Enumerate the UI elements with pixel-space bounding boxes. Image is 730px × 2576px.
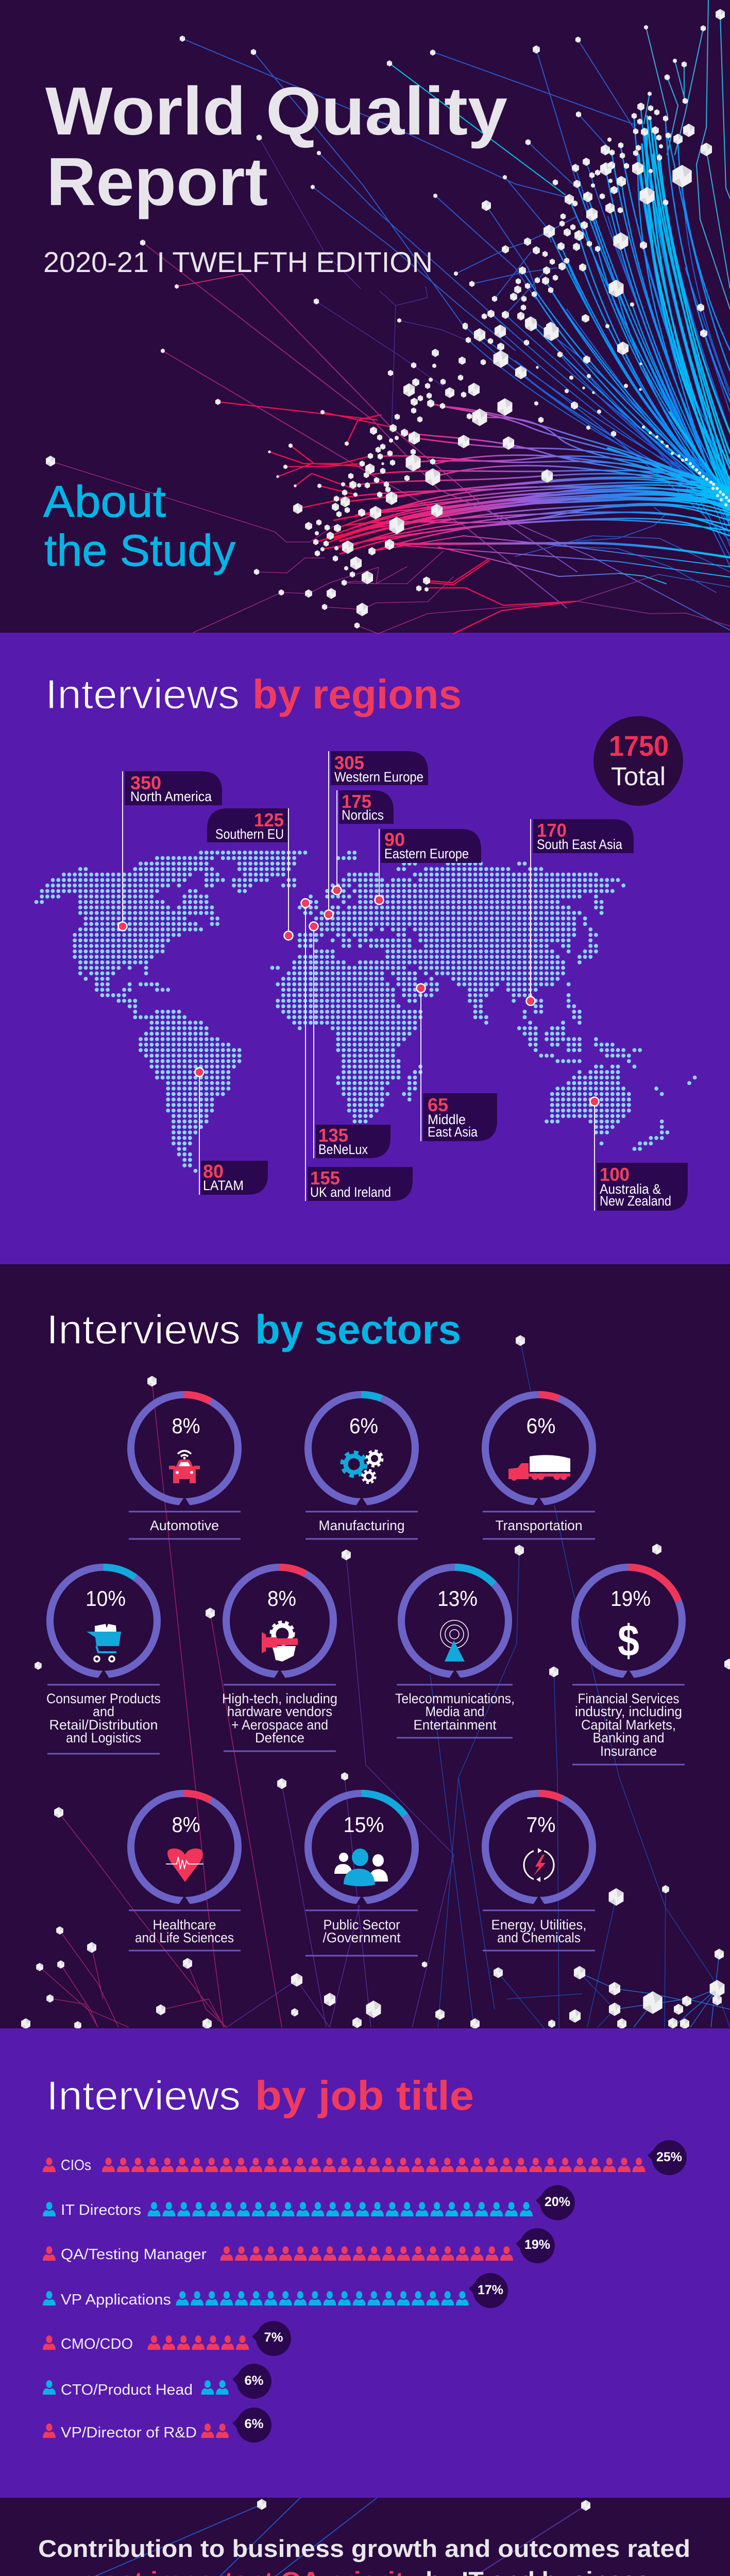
band: job title background <box>0 2028 730 2498</box>
job row: CTO/Product Head 6%: CTO/Product Head <box>61 2382 193 2398</box>
sector: Telecommunications 13%: Telecommunications, <box>395 1691 515 1706</box>
job row: VP Applications 17%: VP Applications <box>61 2292 171 2308</box>
sector: Financial Services 19%: Capital Markets, <box>581 1717 676 1733</box>
hero subtitle: edition: 2020-21 I TWELFTH EDITION <box>43 246 433 278</box>
sector: Manufacturing 6% <box>305 1395 418 1539</box>
sector: Manufacturing 6%: 6% <box>349 1414 378 1438</box>
sector: Public Sector 15%: /Government <box>322 1930 401 1945</box>
job row: IT Directors 20%: IT Directors <box>61 2202 141 2218</box>
flag: 100 Australia and New Zealand: Australia & <box>600 1181 661 1197</box>
band: contribution background <box>0 2498 730 2576</box>
flag: 65 Middle East Asia: Middle <box>428 1112 466 1127</box>
job row: VP/Director of R&D 6%: 6% <box>244 2417 264 2431</box>
sector: Public Sector 15% <box>305 1793 418 1956</box>
sector: Public Sector 15%: Public Sector <box>324 1917 400 1933</box>
sector: Consumer Products 10%: Consumer Products <box>46 1691 161 1706</box>
sectors network artwork <box>40 1341 730 2035</box>
flag: 100 Australia and New Zealand: New Zealand <box>600 1193 671 1209</box>
flag: 135 BeNeLux <box>309 922 391 1158</box>
heading: contribution to business growth: Contribution to business growth and outcomes rated <box>38 2535 690 2562</box>
heading: interviews by job title <box>46 2073 474 2119</box>
sector: High-tech 8%: hardware vendors <box>227 1704 332 1719</box>
sector: Telecommunications 13% <box>395 1567 515 1738</box>
job row: CMO/CDO 7%: 7% <box>264 2330 283 2345</box>
heading: interviews by regions: Interviews <box>45 671 240 717</box>
sector: High-tech 8% <box>222 1567 337 1751</box>
sector: High-tech 8%: Defence <box>255 1730 304 1745</box>
sector: Energy 7%: and Chemicals <box>497 1930 581 1945</box>
heading: interviews by sectors: Interviews <box>46 1307 241 1352</box>
flag: 170 South East Asia: South East Asia <box>537 837 623 852</box>
job row: VP/Director of R&D 6% <box>43 2408 271 2443</box>
sector: Telecommunications 13%: Media and <box>426 1704 484 1719</box>
contribution network artwork <box>0 2498 716 2576</box>
flag: 350 North America <box>118 771 222 930</box>
sector: Automotive 8%: 8% <box>172 1414 200 1438</box>
sector: Financial Services 19% <box>572 1567 685 1765</box>
hero title <box>45 73 507 219</box>
sector: Transportation 6%: 6% <box>527 1414 555 1438</box>
job row: CIOs 25% <box>43 2140 687 2175</box>
job row: VP Applications 17% <box>43 2273 508 2308</box>
heading: interviews by sectors: by sectors <box>255 1307 461 1352</box>
heading: interviews by regions: by regions <box>252 671 462 717</box>
sector: Consumer Products 10% <box>46 1567 161 1754</box>
sector: Consumer Products 10%: and Logistics <box>66 1730 141 1745</box>
sector: Transportation 6% <box>483 1395 595 1539</box>
flag: 65 Middle East Asia: 65 <box>428 1094 448 1115</box>
callout: 1750 total <box>593 716 683 806</box>
flag: 65 Middle East Asia: East Asia <box>428 1124 478 1140</box>
sector: Financial Services 19%: industry, including <box>575 1704 682 1719</box>
job row: QA/Testing Manager 19%: QA/Testing Manager <box>61 2246 207 2263</box>
job row: CIOs 25%: CIOs <box>61 2157 91 2174</box>
flag: 155 UK and Ireland <box>301 899 413 1201</box>
sector: Healthcare 8%: 8% <box>172 1812 200 1837</box>
sector: High-tech 8%: + Aerospace and <box>231 1717 328 1733</box>
job row: CMO/CDO 7%: CMO/CDO <box>61 2336 133 2352</box>
job row: CTO/Product Head 6%: 6% <box>244 2374 264 2388</box>
flag: 175 Nordics: Nordics <box>342 807 384 823</box>
sector: Energy 7%: Energy, Utilities, <box>491 1917 586 1933</box>
flag: 175 Nordics <box>333 790 394 894</box>
heading: interviews by sectors <box>46 1307 461 1352</box>
flag: 80 LATAM: LATAM <box>203 1178 244 1193</box>
sector: Telecommunications 13%: Entertainment <box>413 1717 497 1733</box>
hero heading: about the study: About <box>43 477 166 527</box>
callout: 1750 total: 1750 <box>609 730 669 762</box>
job row: CMO/CDO 7% <box>43 2321 291 2356</box>
flag: 125 Southern EU <box>207 808 293 940</box>
hero heading: about the study <box>43 477 235 575</box>
heading: interviews by job title: by job title <box>255 2073 474 2119</box>
sector: High-tech 8%: 8% <box>267 1586 296 1611</box>
job row: VP Applications 17%: 17% <box>478 2283 503 2297</box>
flag: 175 Nordics: 175 <box>342 791 371 812</box>
sector: Consumer Products 10%: 10% <box>86 1586 126 1611</box>
flag: 125 Southern EU: Southern EU <box>215 826 284 842</box>
job row: QA/Testing Manager 19%: 19% <box>524 2238 550 2252</box>
contribution crystal nodes <box>0 2499 721 2576</box>
flag: 305 Western Europe: 305 <box>334 752 364 773</box>
sector: Public Sector 15%: 15% <box>343 1812 384 1837</box>
flag: 90 Eastern Europe: 90 <box>384 829 405 850</box>
sectors crystal nodes <box>21 1335 730 2029</box>
hero network artwork <box>50 0 730 634</box>
flag: 350 North America: North America <box>130 789 212 804</box>
hero crystal nodes <box>46 9 729 629</box>
flag: 135 BeNeLux: BeNeLux <box>318 1142 368 1157</box>
sector: Healthcare 8% <box>129 1793 241 1951</box>
flag: 90 Eastern Europe: Eastern Europe <box>384 846 469 861</box>
sector: Financial Services 19%: Banking and <box>592 1730 665 1745</box>
flag: 135 BeNeLux: 135 <box>318 1125 348 1146</box>
sector: Healthcare 8%: Healthcare <box>152 1917 216 1933</box>
job row: CIOs 25%: 25% <box>656 2150 682 2164</box>
flag: 305 Western Europe <box>325 751 428 919</box>
heading: interviews by job title: Interviews <box>46 2073 241 2119</box>
sector: Financial Services 19%: $ <box>618 1616 639 1666</box>
sector: Energy 7% <box>483 1793 595 1951</box>
job row: IT Directors 20%: 20% <box>545 2195 570 2209</box>
flag: 100 Australia and New Zealand <box>590 1097 688 1211</box>
heading: interviews by regions <box>45 671 462 717</box>
flag: 155 UK and Ireland: 155 <box>310 1167 340 1189</box>
flag: 65 Middle East Asia <box>416 984 497 1141</box>
flag: 350 North America: 350 <box>130 772 161 793</box>
flag: 155 UK and Ireland: UK and Ireland <box>310 1184 391 1200</box>
flag: 80 LATAM <box>195 1067 268 1195</box>
callout: 1750 total: Total <box>611 762 666 791</box>
sector: Telecommunications 13%: 13% <box>437 1586 478 1611</box>
sector: Automotive 8% <box>129 1395 241 1539</box>
job row: VP/Director of R&D 6%: VP/Director of R&D <box>61 2425 197 2441</box>
flag: 125 Southern EU: 125 <box>254 809 284 831</box>
sector: High-tech 8%: High-tech, including <box>222 1691 337 1706</box>
hero title: Report <box>46 144 268 219</box>
job row: QA/Testing Manager 19% <box>43 2228 555 2263</box>
hero heading: about the study: the Study <box>44 526 235 575</box>
sector: Consumer Products 10%: and <box>93 1704 114 1719</box>
band: regions background <box>0 633 730 1264</box>
sector: Automotive 8%: Automotive <box>150 1518 219 1533</box>
flag: 305 Western Europe: Western Europe <box>334 769 423 785</box>
flag: 90 Eastern Europe <box>375 829 481 905</box>
sector: Financial Services 19%: Insurance <box>600 1743 657 1759</box>
job row: IT Directors 20% <box>43 2185 575 2221</box>
hero title: World Quality <box>45 73 507 149</box>
sector: Healthcare 8%: and Life Sciences <box>135 1930 234 1945</box>
dotted world map <box>37 853 695 1171</box>
flag: 170 South East Asia: 170 <box>537 820 567 841</box>
flag: 170 South East Asia <box>527 819 634 1006</box>
sector: Financial Services 19%: Financial Services <box>578 1691 679 1706</box>
page background: dark hero <box>0 0 730 633</box>
job row: CTO/Product Head 6% <box>43 2364 271 2399</box>
band: sectors background <box>0 1264 730 2028</box>
heading: contribution to business growth <box>38 2535 690 2576</box>
sector: Energy 7%: 7% <box>527 1812 555 1837</box>
sector: Transportation 6%: Transportation <box>496 1518 582 1533</box>
flag: 100 Australia and New Zealand: 100 <box>600 1164 630 1185</box>
sector: Manufacturing 6%: Manufacturing <box>318 1518 405 1533</box>
sector: Financial Services 19%: 19% <box>610 1586 651 1611</box>
band edge: job title top cover <box>0 2028 730 2039</box>
sector: Consumer Products 10%: Retail/Distribution <box>49 1717 158 1733</box>
flag: 80 LATAM: 80 <box>203 1161 224 1182</box>
